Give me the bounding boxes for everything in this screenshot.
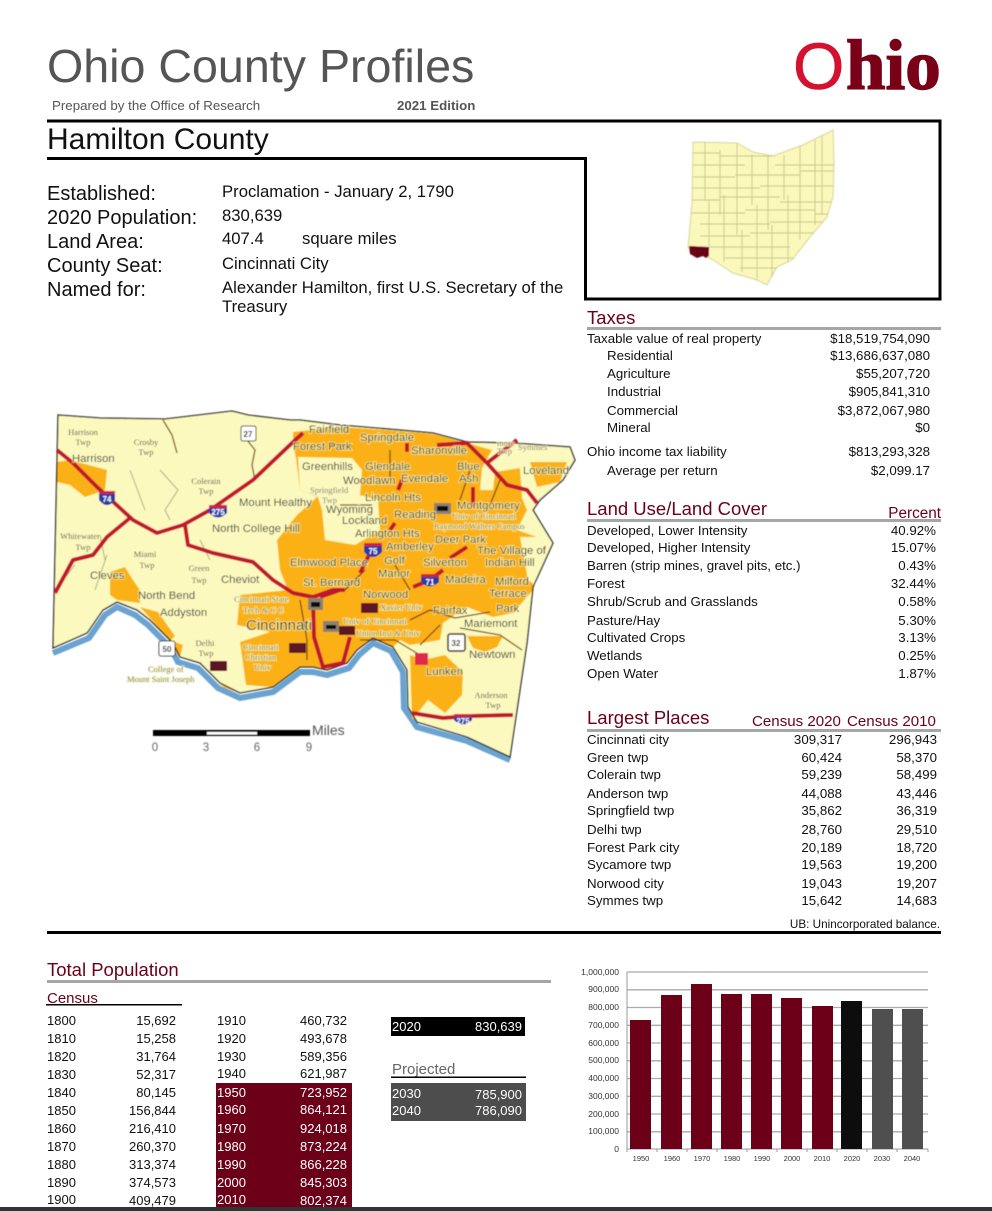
census table: 1800 to 1900: 1850 xyxy=(47,1103,76,1118)
panel: largest places: Symmes twp xyxy=(587,893,663,908)
map place labels: Harrison xyxy=(72,453,115,465)
unincorporated patches xyxy=(298,457,380,545)
census table: 1800 to 1900: 1870 xyxy=(47,1139,76,1154)
census table: 1950 to 2010 highlighted: 873,224 xyxy=(300,1139,347,1154)
highway shields: 74 xyxy=(103,495,112,504)
panel: land use and land cover: Barren (strip mines, gravel pits, etc.) xyxy=(587,558,801,573)
census table: 1800 to 1900: 80,145 xyxy=(136,1085,176,1100)
panel: land use and land cover: Forest xyxy=(587,576,625,591)
panel: land use and land cover: Wetlands xyxy=(587,648,643,663)
highway shields: 75 xyxy=(369,547,378,556)
scale bar: 3 xyxy=(203,742,209,754)
panel: county facts: 407.4 xyxy=(222,229,264,248)
map place labels: Union Inst & Univ xyxy=(356,628,421,638)
map place labels: Springfield xyxy=(310,485,349,495)
panel: county facts: Alexander Hamilton, first U.S. Secretary of the xyxy=(222,278,563,297)
map place labels: Cincinnati xyxy=(246,617,312,634)
map place labels: Christian xyxy=(245,652,277,662)
panel: largest places: 309,317 xyxy=(794,732,842,747)
highway shields: 275 xyxy=(456,717,470,726)
panel: county facts: Proclamation - January 2, 1790 xyxy=(222,182,454,201)
map place labels: Reading xyxy=(394,509,436,521)
map place labels xyxy=(60,424,569,710)
panel: largest places: 60,424 xyxy=(801,750,842,765)
map place labels: Amberley xyxy=(386,541,434,553)
scale bar xyxy=(152,722,345,754)
county outline xyxy=(53,411,575,757)
chart x axis labels: 1990 xyxy=(754,1154,770,1163)
projected values: 2040 xyxy=(392,1103,421,1118)
panel: largest places: 15,642 xyxy=(801,893,842,908)
panel: taxes: $813,293,328 xyxy=(849,444,930,459)
map place labels: Twp xyxy=(497,446,512,456)
map place labels: Tech & C C xyxy=(243,605,284,615)
map place labels: Glendale xyxy=(365,461,410,473)
bar chart: population 1950 to 2040 xyxy=(581,967,928,1163)
panel: largest places: 19,043 xyxy=(801,876,842,891)
chart y axis labels: 0 xyxy=(614,1144,619,1154)
map place labels: Mount Saint Joseph xyxy=(127,674,195,684)
panel: county facts: County Seat: xyxy=(47,255,163,277)
chart x axis labels: 2010 xyxy=(814,1154,830,1163)
map place labels: Manor xyxy=(378,568,410,580)
map place labels: Twp xyxy=(76,437,90,447)
panel: taxes: $18,519,754,090 xyxy=(830,331,930,346)
map place labels: Raymond Walters Campus xyxy=(434,521,525,531)
panel: taxes: Taxable value of real property xyxy=(587,331,762,346)
Ohio logo: O xyxy=(793,29,844,103)
census table: 1800 to 1900: 1860 xyxy=(47,1121,76,1136)
census table: 1800 to 1900: 15,258 xyxy=(136,1031,176,1046)
census table: 1910 to 1940: 493,678 xyxy=(300,1031,347,1046)
panel: land use and land cover: 3.13% xyxy=(898,630,936,645)
chart x axis labels: 2040 xyxy=(904,1154,920,1163)
panel: largest places: 35,862 xyxy=(801,803,842,818)
panel: largest places: 19,563 xyxy=(801,857,842,872)
census table: 1800 to 1900: 313,374 xyxy=(129,1157,176,1172)
panel: county facts: Established: xyxy=(47,183,156,205)
map place labels: Lockland xyxy=(342,515,387,527)
map place labels: Milford xyxy=(495,576,529,588)
panel: land use and land cover: 32.44% xyxy=(891,576,936,591)
highway shields: 27 xyxy=(244,430,253,439)
projected values: 785,900 xyxy=(475,1087,522,1102)
panel: largest places: 19,207 xyxy=(896,876,937,891)
chart y axis labels: 400,000 xyxy=(588,1073,619,1083)
census table: 1800 to 1900: 52,317 xyxy=(136,1067,176,1082)
census table: 1800 to 1900: 156,844 xyxy=(129,1103,176,1118)
panel: land use and land cover: Land Use/Land Cover xyxy=(587,498,767,519)
census table: 1950 to 2010 highlighted: 1980 xyxy=(217,1139,246,1154)
map place labels: North Bend xyxy=(138,590,195,602)
panel: largest places: 28,760 xyxy=(801,822,842,837)
map place labels: North College Hill xyxy=(212,523,300,535)
map place labels: Lunken xyxy=(426,666,463,678)
panel: largest places: Sycamore twp xyxy=(587,857,671,872)
highway shields xyxy=(99,426,472,726)
census table: 1950 to 2010 highlighted: 2010 xyxy=(217,1192,246,1207)
map place labels: Madeira xyxy=(445,574,487,586)
census table: 1800 to 1900: 1900 xyxy=(47,1192,76,1207)
panel: taxes: Industrial xyxy=(607,384,661,399)
panel: land use and land cover: Developed, Lower Intensity xyxy=(587,523,748,538)
panel: total population tables: Census xyxy=(47,990,98,1007)
map place labels: Ash xyxy=(459,473,478,485)
panel: largest places: 59,239 xyxy=(801,767,842,782)
map place labels: Addyston xyxy=(160,607,207,619)
chart x axis labels: 2020 xyxy=(844,1154,860,1163)
highway shields: 71 xyxy=(426,578,435,587)
map place labels: Miami xyxy=(134,549,157,559)
census table: 1800 to 1900: 1800 xyxy=(47,1013,76,1028)
map place labels: Cleves xyxy=(90,570,125,582)
census table: 1910 to 1940: 1930 xyxy=(217,1049,246,1064)
census table: 1910 to 1940: 589,356 xyxy=(300,1049,347,1064)
scale bar: 9 xyxy=(306,742,312,754)
map place labels: Blue xyxy=(457,461,480,473)
map place labels: Twp xyxy=(140,560,154,570)
map place labels: Cheviot xyxy=(221,574,260,586)
county frame xyxy=(47,121,940,299)
census table: 1800 to 1900 xyxy=(47,1013,176,1208)
census table: 1800 to 1900: 1820 xyxy=(47,1049,76,1064)
census table: 1800 to 1900: 409,479 xyxy=(129,1193,176,1208)
map place labels: Arlington Hts xyxy=(355,528,420,540)
panel: largest places: 20,189 xyxy=(801,840,842,855)
map place labels: Symmes xyxy=(518,442,547,452)
map place labels: Newtown xyxy=(469,649,515,661)
census table: 1800 to 1900: 1840 xyxy=(47,1085,76,1100)
panel: largest places: Forest Park city xyxy=(587,840,680,855)
panel: taxes: Taxes xyxy=(587,307,635,328)
panel: county facts: Land Area: xyxy=(47,231,144,253)
map place labels: Wyoming xyxy=(326,504,373,516)
census table: 1950 to 2010 highlighted: 845,303 xyxy=(300,1175,347,1190)
panel: taxes: Average per return xyxy=(607,463,718,478)
chart x axis labels xyxy=(633,1154,920,1163)
scale bar: Miles xyxy=(312,722,345,738)
panel: largest places: 58,499 xyxy=(896,767,937,782)
map place labels: The Village of xyxy=(477,545,547,557)
panel: taxes: Agriculture xyxy=(607,366,671,381)
panel: land use and land cover: Percent xyxy=(888,505,942,522)
map place labels: Lincoln Hts xyxy=(365,492,421,504)
chart y axis labels: 800,000 xyxy=(588,1002,619,1012)
panel: county facts: square miles xyxy=(302,229,397,248)
map place labels: Elmwood Place xyxy=(290,557,368,569)
map place labels: Anderson xyxy=(474,690,508,700)
map place labels: Mariemont xyxy=(464,618,518,630)
panel: largest places: 18,720 xyxy=(896,840,937,855)
map place labels: Twp xyxy=(486,700,500,710)
census table: 1950 to 2010 highlighted: 1990 xyxy=(217,1157,246,1172)
map place labels: Twp xyxy=(192,575,206,585)
highway shields: 275 xyxy=(211,508,225,517)
panel: land use and land cover: 40.92% xyxy=(891,523,936,538)
panel: largest places: 14,683 xyxy=(896,893,937,908)
panel: largest places: 44,088 xyxy=(801,786,842,801)
map place labels: Montgomery xyxy=(457,500,520,512)
map place labels: Silverton xyxy=(423,557,467,569)
panel: largest places: Census 2010 xyxy=(847,713,936,730)
county base xyxy=(53,411,575,757)
panel: land use and land cover: Open Water xyxy=(587,666,659,681)
highway shields: 50 xyxy=(163,645,172,654)
map place labels: Whitewater xyxy=(60,531,100,541)
census table: 1910 to 1940: 1940 xyxy=(217,1066,246,1081)
panel: land use and land cover: Pasture/Hay xyxy=(587,613,661,628)
panel: land use and land cover: Cultivated Crops xyxy=(587,630,686,645)
census table: 1800 to 1900: 31,764 xyxy=(136,1049,176,1064)
chart y axis labels: 100,000 xyxy=(588,1126,619,1136)
panel: taxes: Ohio income tax liability xyxy=(587,444,727,459)
chart x axis labels: 1980 xyxy=(724,1154,740,1163)
minor roads xyxy=(163,420,522,660)
map place labels: Cincinnati xyxy=(243,642,279,652)
panel: largest places: 19,200 xyxy=(896,857,937,872)
panel: largest places: 58,370 xyxy=(896,750,937,765)
map place labels: Cincinnati State xyxy=(234,594,289,604)
census table: 1910 to 1940: 1910 xyxy=(217,1013,246,1028)
map place labels: Mount Healthy xyxy=(239,497,312,509)
chart y axis labels: 300,000 xyxy=(588,1091,619,1101)
chart x axis labels: 1970 xyxy=(694,1154,710,1163)
map place labels: Delhi xyxy=(196,638,215,648)
subtitle: prepared by: Prepared by the Office of Research xyxy=(52,98,260,113)
chart grid xyxy=(627,972,928,1132)
panel: largest places: 43,446 xyxy=(896,786,937,801)
2020 census value: 2020 xyxy=(392,1019,421,1034)
panel: land use and land cover: 0.43% xyxy=(898,558,936,573)
panel: land use and land cover: Shrub/Scrub and Grasslands xyxy=(587,594,758,609)
census table: 1950 to 2010 highlighted: 864,121 xyxy=(300,1102,347,1117)
chart y axis labels: 500,000 xyxy=(588,1055,619,1065)
panel: county facts: Treasury xyxy=(222,297,288,316)
panel: largest places: Springfield twp xyxy=(587,803,674,818)
panel: largest places: Colerain twp xyxy=(587,767,661,782)
census table: 1800 to 1900: 1890 xyxy=(47,1175,76,1190)
map place labels: Crosby xyxy=(134,437,159,447)
map place labels: more xyxy=(497,438,515,448)
map place labels: Greenhills xyxy=(302,461,353,473)
panel: largest places: Norwood city xyxy=(587,876,664,891)
panel: land use and land cover: 5.30% xyxy=(898,613,936,628)
chart x axis labels: 2000 xyxy=(784,1154,800,1163)
locator map: Ohio with Hamilton County highlighted xyxy=(685,130,835,285)
census table: 1950 to 2010 highlighted: 723,952 xyxy=(300,1085,347,1100)
map place labels: Norwood xyxy=(363,589,408,601)
panel: largest places: Delhi twp xyxy=(587,822,642,837)
map place labels: Twp xyxy=(138,447,154,457)
panel: land use and land cover: 0.25% xyxy=(898,648,936,663)
panel: largest places: Census 2020 xyxy=(752,713,841,730)
chart y axis labels xyxy=(581,967,619,1154)
map place labels: Woodlawn xyxy=(343,475,396,487)
map place labels: Park xyxy=(496,603,520,615)
map place labels: Univ of Cincinnati xyxy=(343,616,407,626)
highway shields: 32 xyxy=(452,639,461,648)
panel: taxes: $905,841,310 xyxy=(849,384,930,399)
chart y axis labels: 1,000,000 xyxy=(581,967,619,977)
census table: 1910 to 1940 xyxy=(217,1013,347,1081)
census table: 1800 to 1900: 1830 xyxy=(47,1067,76,1082)
census table: 1950 to 2010 highlighted xyxy=(216,1083,352,1208)
map place labels: College of xyxy=(148,664,184,674)
census table: 1950 to 2010 highlighted: 802,374 xyxy=(300,1193,347,1208)
map place labels: Deer Park xyxy=(435,534,486,546)
panel: taxes: $2,099.17 xyxy=(871,463,930,478)
census table: 1800 to 1900: 260,370 xyxy=(129,1139,176,1154)
title: Ohio County Profiles xyxy=(47,40,474,92)
2020 census value: 830,639 xyxy=(475,1019,522,1034)
chart y axis labels: 200,000 xyxy=(588,1109,619,1119)
census table: 1950 to 2010 highlighted: 1950 xyxy=(217,1085,246,1100)
census table: 1950 to 2010 highlighted: 2000 xyxy=(217,1175,246,1190)
panel: taxes: $3,872,067,980 xyxy=(838,403,930,418)
map place labels: Forest Park xyxy=(293,441,352,453)
panel: land use and land cover: 15.07% xyxy=(891,540,936,555)
river xyxy=(53,607,510,760)
panel: taxes: $13,686,637,080 xyxy=(830,348,930,363)
census table: 1950 to 2010 highlighted: 866,228 xyxy=(300,1157,347,1172)
urban areas xyxy=(57,427,567,720)
chart x axis labels: 2030 xyxy=(874,1154,890,1163)
map place labels: Univ of Cincinnati xyxy=(452,511,516,521)
panel: county facts: 2020 Population: xyxy=(47,207,197,229)
map place labels: Twp xyxy=(322,495,337,505)
edition: 2021 Edition xyxy=(397,98,475,113)
panel: total population tables xyxy=(46,959,551,1208)
panel: taxes: Residential xyxy=(607,348,673,363)
census table: 1800 to 1900: 374,573 xyxy=(129,1175,176,1190)
scale bar: 0 xyxy=(152,742,158,754)
map place labels: Sharonville xyxy=(411,445,467,457)
icon: Hamilton County highlight xyxy=(689,246,709,258)
map place labels: Indian Hill xyxy=(485,557,535,569)
chart bars xyxy=(630,984,923,1149)
projected values: 786,090 xyxy=(475,1103,522,1118)
county map xyxy=(53,411,575,760)
panel: largest places: 29,510 xyxy=(896,822,937,837)
panel: county facts: Named for: xyxy=(47,279,146,301)
panel: largest places: Anderson twp xyxy=(587,786,668,801)
census table: 1950 to 2010 highlighted: 924,018 xyxy=(300,1121,347,1136)
panel: taxes: Mineral xyxy=(607,420,651,435)
panel: largest places: 36,319 xyxy=(896,803,937,818)
panel: largest places: 296,943 xyxy=(889,732,937,747)
map place labels: Harrison xyxy=(68,427,99,437)
map place labels: Springdale xyxy=(360,432,414,444)
chart x axis labels: 1950 xyxy=(633,1154,649,1163)
chart y axis labels: 900,000 xyxy=(588,984,619,994)
census table: 1800 to 1900: 1880 xyxy=(47,1157,76,1172)
map place labels: Twp xyxy=(76,542,90,552)
map place labels: Green xyxy=(189,563,210,573)
census table: 1950 to 2010 highlighted: 1970 xyxy=(217,1121,246,1136)
census table: 1910 to 1940: 460,732 xyxy=(300,1013,347,1028)
facility icons xyxy=(210,503,451,671)
projected values xyxy=(391,1061,526,1121)
census table: 1800 to 1900: 15,692 xyxy=(136,1013,176,1028)
map place labels: Univ xyxy=(254,662,272,672)
panel: taxes: $0 xyxy=(915,420,930,435)
map place labels: Fairfield xyxy=(309,424,349,436)
county name heading: Hamilton County xyxy=(47,123,269,156)
map place labels: Golf xyxy=(384,555,406,567)
panel: largest places: Green twp xyxy=(587,750,648,765)
map place labels: Colerain xyxy=(191,476,221,486)
chart x axis labels: 1960 xyxy=(664,1154,680,1163)
map place labels: Twp xyxy=(198,648,214,658)
panel: county facts: Cincinnati City xyxy=(222,254,329,273)
map place labels: Loveland xyxy=(523,465,569,477)
panel: land use and land cover: 0.58% xyxy=(898,594,936,609)
Ohio logo xyxy=(793,27,941,105)
map place labels: St. Bernard xyxy=(303,577,360,589)
panel: land use and land cover: Developed, Higher Intensity xyxy=(587,540,751,555)
census table: 1910 to 1940: 1920 xyxy=(217,1031,246,1046)
panel: county facts xyxy=(47,182,563,316)
map place labels: Evendale xyxy=(401,473,448,485)
panel: largest places: UB: Unincorporated balance. xyxy=(790,918,940,931)
panel: largest places: Cincinnati city xyxy=(587,732,669,747)
scale bar: 6 xyxy=(254,742,260,754)
panel: county facts: 830,639 xyxy=(222,206,282,225)
2020 census value xyxy=(391,1017,525,1036)
highways xyxy=(55,433,537,718)
panel: largest places: Largest Places xyxy=(587,707,709,728)
census table: 1950 to 2010 highlighted: 1960 xyxy=(217,1102,246,1117)
panel: land use and land cover: 1.87% xyxy=(898,666,936,681)
map place labels: Twp xyxy=(198,486,214,496)
chart y axis labels: 600,000 xyxy=(588,1038,619,1048)
panel: taxes xyxy=(587,307,941,478)
panel: taxes: Commercial xyxy=(607,403,678,418)
projected values: Projected xyxy=(392,1061,455,1078)
panel: land use and land cover xyxy=(587,498,942,681)
projected values: 2030 xyxy=(392,1086,421,1101)
panel: taxes: $55,207,720 xyxy=(856,366,930,381)
census table: 1910 to 1940: 621,987 xyxy=(300,1066,347,1081)
map place labels: Terrace xyxy=(489,588,527,600)
map place labels: Xavier Univ xyxy=(380,602,423,612)
panel: total population tables: Total Population xyxy=(47,959,179,980)
census table: 1800 to 1900: 216,410 xyxy=(129,1121,176,1136)
map place labels: Fairfax xyxy=(433,605,468,617)
chart y axis labels: 700,000 xyxy=(588,1020,619,1030)
census table: 1800 to 1900: 1810 xyxy=(47,1031,76,1046)
Ohio logo: hio xyxy=(846,27,941,105)
panel: largest places xyxy=(587,707,941,931)
